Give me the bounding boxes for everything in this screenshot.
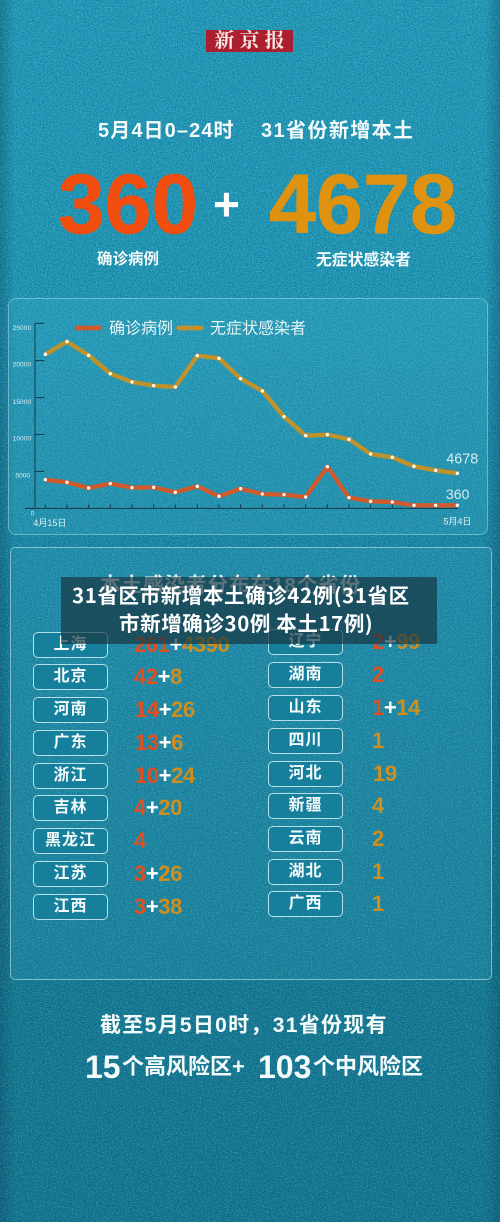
row: 北京: 北京 [53, 668, 88, 685]
row: 河北 [268, 761, 397, 787]
footer line: risk area counts: 15 [85, 1049, 121, 1085]
province list: left column [33, 632, 229, 920]
footer line: risk area counts [85, 1049, 423, 1085]
row: 浙江: 10+24 [135, 763, 195, 788]
row: 上海: 261+4390 [134, 632, 229, 657]
row: 广西 [268, 891, 384, 917]
line chart: 15000 [13, 399, 31, 406]
row: 辽宁: 辽宁 [288, 633, 322, 650]
row: 广东: 广东 [53, 734, 88, 751]
row: 云南 [268, 826, 384, 852]
line chart: 0 [31, 510, 35, 517]
row: 江苏 [33, 861, 182, 887]
row: 河北: 19 [373, 761, 397, 786]
line chart: 360 [446, 486, 470, 502]
footer line: risk area counts: 103 [258, 1049, 311, 1085]
row: 上海: 上海 [53, 636, 88, 653]
row: 新疆: 4 [372, 793, 384, 818]
plus sign: + [213, 178, 240, 230]
row: 山东: 山东 [288, 699, 322, 716]
row: 浙江: 浙江 [53, 767, 88, 784]
panel: regional distribution [10, 547, 492, 980]
logo: 新京报: 新京报 [214, 30, 290, 52]
row: 江苏: 江苏 [53, 865, 88, 882]
row: 浙江 [33, 763, 196, 789]
row: 山东 [268, 695, 420, 721]
row: 云南: 2 [372, 826, 384, 851]
heading: date and scope [98, 120, 414, 142]
line chart: 20000 [13, 362, 31, 369]
line chart [12, 319, 478, 528]
row: 新疆: 新疆 [288, 797, 322, 814]
line chart: 无症状感染者 [210, 319, 306, 337]
row: 江西 [33, 894, 182, 920]
footer line: risk area counts: 个中风险区 [313, 1054, 423, 1079]
heading: date and scope: 5月4日0–24时 [98, 120, 235, 142]
row: 吉林 [33, 795, 182, 821]
row: 四川 [268, 728, 384, 754]
footer line: as of date: 截至5月5日0时，31省份现有 [100, 1014, 388, 1037]
row: 江西: 江西 [53, 898, 88, 915]
row: 湖北 [268, 859, 384, 885]
big number: asymptomatic 4678: 4678 [269, 157, 457, 251]
row: 黑龙江: 4 [134, 828, 146, 853]
row: 四川: 1 [372, 728, 384, 753]
row: 湖北: 湖北 [288, 863, 322, 880]
line chart: 10000 [13, 436, 31, 443]
row: 湖南: 湖南 [288, 666, 322, 683]
row: 河北: 河北 [288, 765, 322, 782]
caption overlay banner [61, 577, 437, 644]
row: 黑龙江 [33, 828, 146, 854]
row: 新疆 [268, 793, 384, 819]
line chart: 确诊病例 [109, 319, 173, 337]
row: 吉林: 吉林 [53, 799, 88, 816]
line chart: 5月4日 [443, 517, 471, 527]
panel heading: 本土感染者分布在18个省份 [100, 574, 361, 597]
row: 湖北: 1 [372, 859, 384, 884]
label: confirmed cases: 确诊病例 [97, 251, 159, 268]
row: 云南: 云南 [288, 830, 322, 847]
row: 辽宁: 2+99 [372, 629, 420, 654]
panel: trend line chart [8, 298, 488, 535]
row: 湖南: 2 [372, 662, 384, 687]
heading: date and scope: 31省份新增本土 [261, 120, 414, 142]
row: 河南: 河南 [53, 701, 88, 718]
row: 山东: 1+14 [372, 695, 420, 720]
row: 黑龙江: 黑龙江 [45, 832, 96, 849]
line chart: 4月15日 [33, 518, 66, 528]
caption overlay banner: 31省区市新增本土确诊42例(31省区 [72, 579, 410, 609]
row: 四川: 四川 [288, 732, 322, 749]
line chart: 4678 [446, 451, 478, 467]
row: 江西: 3+38 [134, 894, 182, 919]
big number: confirmed 360: 360 [58, 157, 198, 251]
label: asymptomatic cases: 无症状感染者 [316, 252, 411, 269]
footer line: risk area counts: 个高风险区+ [122, 1054, 245, 1079]
row: 河南: 14+26 [135, 697, 195, 722]
row: 吉林: 4+20 [134, 795, 182, 820]
row: 河南 [33, 697, 195, 723]
row: 湖南 [268, 662, 384, 688]
row: 江苏: 3+26 [134, 861, 182, 886]
line chart: 5000 [15, 473, 30, 480]
row: 广东 [33, 730, 183, 756]
row: 北京 [33, 664, 182, 690]
row: 广西: 1 [372, 891, 384, 916]
row: 北京: 42+8 [134, 664, 182, 689]
row: 广东: 13+6 [135, 730, 183, 755]
row: 辽宁 [268, 629, 420, 655]
caption overlay banner: 市新增确诊30例 本土17例) [119, 607, 373, 637]
province list: right column [268, 629, 420, 917]
line chart: 25000 [13, 325, 31, 332]
row: 上海 [33, 632, 229, 658]
row: 广西: 广西 [288, 895, 322, 912]
